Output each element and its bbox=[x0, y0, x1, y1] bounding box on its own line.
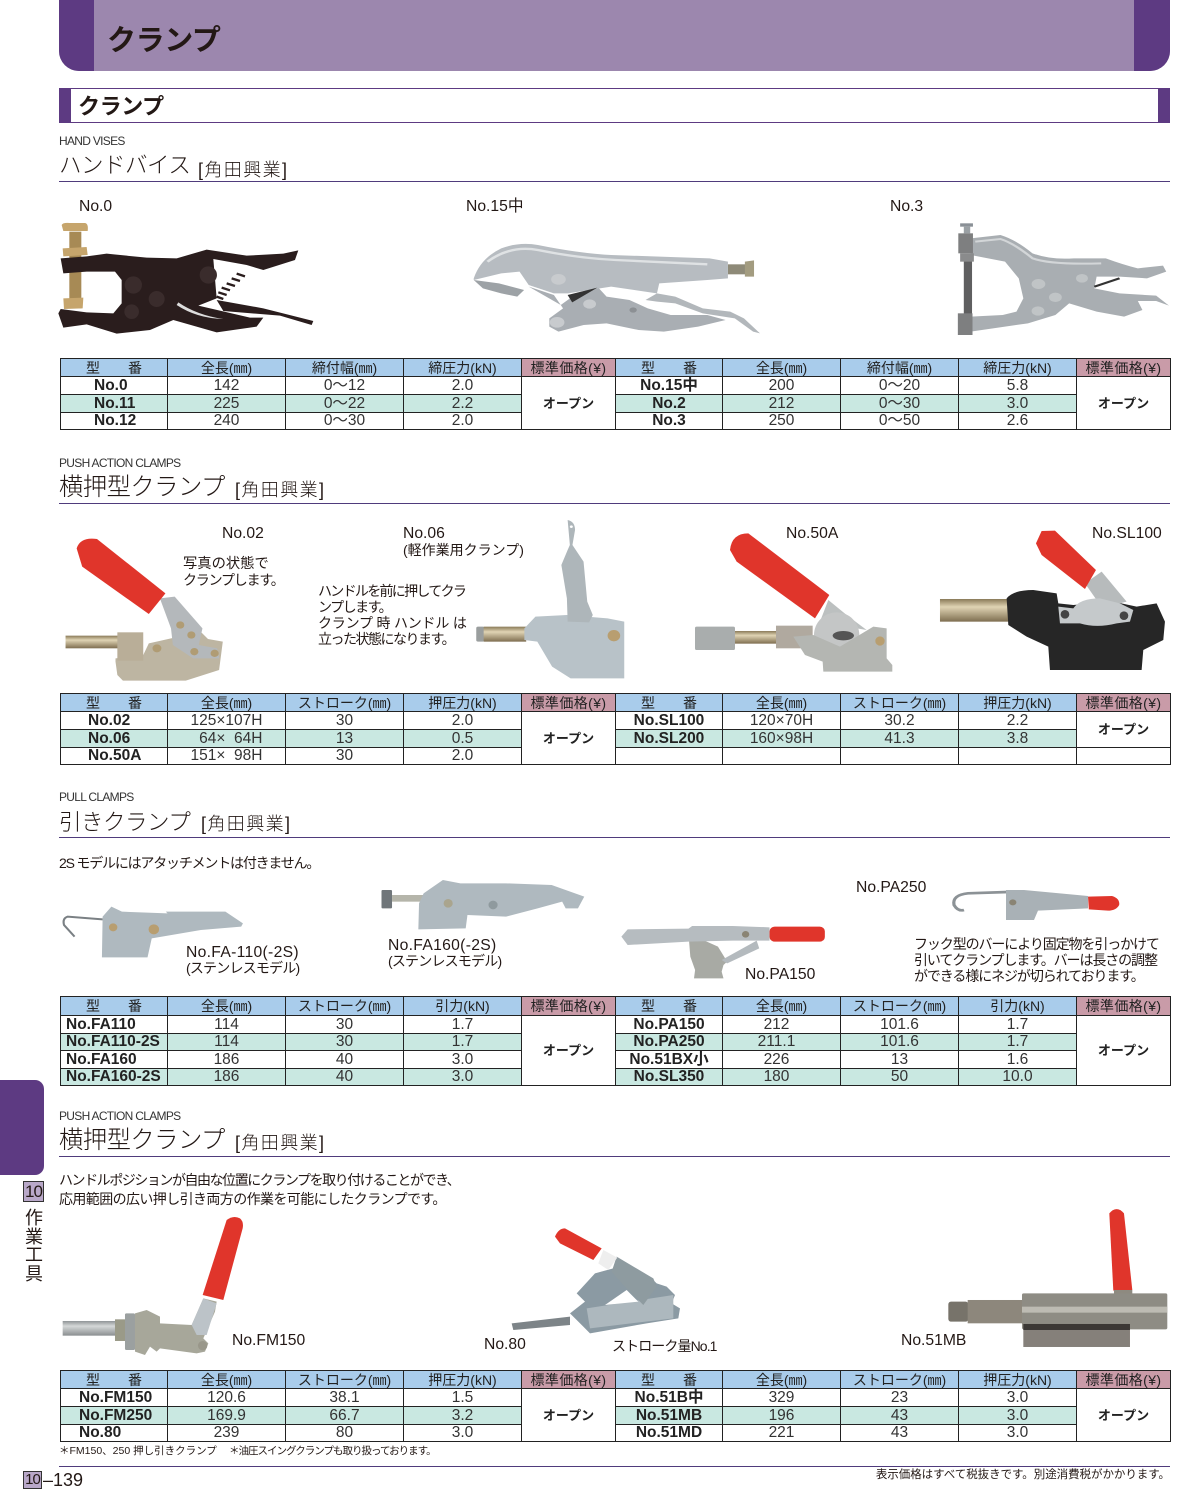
spec table: pull clamps: No.FA160 bbox=[66, 1050, 137, 1068]
section heading: pull clamps: [角田興業] bbox=[201, 814, 291, 834]
side tab bbox=[0, 1080, 44, 1175]
spec table: pull clamps bbox=[60, 996, 1171, 1086]
section heading: hand vises: ハンドバイス bbox=[59, 153, 190, 178]
spec table: hand vises: No.11 bbox=[94, 394, 135, 412]
spec table: push action clamps: 41.3 bbox=[884, 730, 915, 746]
spec table: push action clamps: No.SL100 bbox=[634, 712, 704, 729]
spec table: pull clamps: 標準価格(¥) bbox=[531, 998, 606, 1014]
spec table: hand vises: 2.0 bbox=[452, 377, 473, 394]
spec table: hand vises: 0～50 bbox=[879, 412, 920, 429]
section heading: push action clamps 2: 横押型クランプ bbox=[59, 1127, 225, 1154]
spec table: push action clamps: 64× 64H bbox=[199, 730, 262, 746]
spec table: pull clamps: No.FA160-2S bbox=[66, 1068, 161, 1085]
section heading: push action clamps: PUSH ACTION CLAMPS bbox=[59, 456, 180, 470]
spec table: push action clamps 2 bbox=[60, 1370, 1171, 1442]
spec table: pull clamps: No.FA110-2S bbox=[66, 1033, 160, 1050]
spec table: pull clamps: 114 bbox=[214, 1016, 239, 1032]
labels: push action clamps: クランプします。 bbox=[183, 572, 284, 588]
spec table: hand vises: 225 bbox=[214, 394, 239, 412]
spec table: pull clamps: 226 bbox=[764, 1050, 789, 1068]
description: push action clamps 2: ハンドルポジションが自由な位置にクランプを取り付けることができ、 bbox=[59, 1172, 459, 1188]
spec table: push action clamps: 型 番 bbox=[86, 694, 142, 710]
labels: pull clamps: (ステンレスモデル) bbox=[388, 953, 501, 969]
spec table: push action clamps 2: 43 bbox=[891, 1424, 908, 1441]
spec table: hand vises: No.15中 bbox=[640, 377, 698, 394]
spec table: pull clamps: ストローク(㎜) bbox=[298, 998, 391, 1014]
spec table: push action clamps: オープン bbox=[543, 730, 594, 746]
spec table: hand vises: 142 bbox=[214, 377, 239, 394]
spec table: pull clamps: 10.0 bbox=[1002, 1068, 1033, 1085]
spec table: push action clamps: 押圧力(kN) bbox=[983, 694, 1052, 710]
spec table: hand vises: 締圧力(kN) bbox=[983, 360, 1052, 376]
spec table: push action clamps: 120×70H bbox=[750, 712, 813, 729]
spec table: pull clamps: No.51BX小 bbox=[629, 1050, 709, 1068]
labels: pull clamps: No.FA160(-2S) bbox=[388, 937, 497, 954]
photo: hand vise No.3 bbox=[958, 223, 1169, 335]
spec table: push action clamps: 全長(㎜) bbox=[201, 694, 252, 710]
spec table: hand vises: 0～30 bbox=[324, 412, 365, 429]
section heading: pull clamps: 引きクランプ bbox=[59, 810, 190, 835]
spec table: pull clamps: 1.7 bbox=[452, 1016, 473, 1032]
labels: push action clamps: (軽作業用クランプ) bbox=[403, 542, 524, 558]
spec table: push action clamps 2: 169.9 bbox=[207, 1406, 246, 1424]
spec table: push action clamps: 30.2 bbox=[884, 712, 915, 729]
footnote: ＊FM150、250 押し引きクランプ bbox=[59, 1445, 217, 1457]
photo: clamp No.SL100 bbox=[940, 531, 1165, 670]
spec table: push action clamps 2: 型 番 bbox=[86, 1372, 142, 1388]
spec table: push action clamps: No.SL200 bbox=[634, 730, 704, 746]
photo: clamp No.06 bbox=[476, 520, 624, 678]
photo: hand vise No.0 bbox=[58, 223, 313, 334]
photo: clamp PA250 bbox=[954, 890, 1119, 920]
spec table: push action clamps 2: 239 bbox=[214, 1424, 239, 1441]
tax note: 表示価格はすべて税抜きです。別途消費税がかかります。 bbox=[876, 1469, 1170, 1481]
spec table: push action clamps 2: 全長(㎜) bbox=[201, 1372, 252, 1388]
photo: clamp No.51MB bbox=[948, 1209, 1167, 1347]
spec table: pull clamps: 40 bbox=[336, 1068, 353, 1085]
labels: push action clamps 2: No.51MB bbox=[901, 1332, 966, 1349]
spec table: push action clamps: ストローク(㎜) bbox=[298, 694, 391, 710]
spec table: push action clamps 2: 38.1 bbox=[329, 1389, 360, 1406]
section heading: hand vises: HAND VISES bbox=[59, 134, 125, 148]
section heading: pull clamps: PULL CLAMPS bbox=[59, 790, 134, 804]
labels: push action clamps: No.02 bbox=[222, 525, 264, 542]
labels: push action clamps 2: No.FM150 bbox=[232, 1332, 305, 1349]
spec table: pull clamps: 186 bbox=[214, 1068, 239, 1085]
spec table: push action clamps: 151× 98H bbox=[191, 747, 262, 764]
photo: clamp FA160 bbox=[382, 880, 584, 929]
photo: clamp FM150 bbox=[63, 1217, 243, 1355]
labels: hand vises: No.15中 bbox=[466, 198, 524, 215]
spec table: pull clamps: No.PA150 bbox=[633, 1016, 705, 1032]
spec table: push action clamps 2: オープン bbox=[543, 1408, 594, 1422]
spec table: pull clamps: 1.7 bbox=[1007, 1033, 1028, 1050]
spec table: push action clamps: ストローク(㎜) bbox=[853, 694, 946, 710]
spec table: pull clamps: 211.1 bbox=[758, 1033, 795, 1050]
photo: clamp No.50A bbox=[695, 533, 892, 672]
labels: pull clamps: 引いてクランプします。バーは長さの調整 bbox=[914, 952, 1157, 968]
labels: push action clamps bbox=[183, 525, 1162, 647]
spec table: push action clamps 2: ストローク(㎜) bbox=[298, 1372, 391, 1388]
spec table: push action clamps 2: No.FM150 bbox=[79, 1389, 152, 1406]
spec table: hand vises: 全長(㎜) bbox=[756, 360, 807, 376]
spec table: push action clamps: 125×107H bbox=[191, 712, 262, 729]
labels: push action clamps: 立った状態になります。 bbox=[318, 631, 454, 647]
section heading: pull clamps bbox=[59, 790, 1170, 838]
description: push action clamps 2: 応用範囲の広い押し引き両方の作業を可能にしたクランプです。 bbox=[59, 1191, 446, 1207]
side chapter number: 10 bbox=[25, 1182, 42, 1201]
spec table: push action clamps 2: No.80 bbox=[79, 1424, 121, 1441]
spec table: hand vises: No.12 bbox=[94, 412, 136, 429]
section heading: push action clamps: [角田興業] bbox=[235, 480, 325, 500]
spec table: push action clamps 2: ストローク(㎜) bbox=[853, 1372, 946, 1388]
spec table: push action clamps: 2.0 bbox=[452, 747, 473, 764]
spec table: pull clamps: 全長(㎜) bbox=[756, 998, 807, 1014]
spec table: pull clamps: オープン bbox=[1098, 1043, 1149, 1058]
section heading: hand vises bbox=[59, 134, 1170, 182]
spec table: pull clamps: 180 bbox=[764, 1068, 789, 1085]
spec table: push action clamps: 標準価格(¥) bbox=[531, 694, 606, 710]
spec table: push action clamps: No.02 bbox=[88, 712, 130, 729]
page number: 10 bbox=[25, 1471, 40, 1488]
spec table: pull clamps: 101.6 bbox=[880, 1016, 919, 1032]
spec table: push action clamps 2: 3.0 bbox=[1007, 1406, 1028, 1424]
spec table: hand vises: 標準価格(¥) bbox=[531, 360, 606, 376]
spec table: push action clamps 2: 329 bbox=[769, 1389, 794, 1406]
labels: pull clamps: フック型のバーにより固定物を引っかけて bbox=[914, 936, 1159, 952]
spec table: pull clamps: 引力(kN) bbox=[435, 998, 490, 1014]
spec table: push action clamps 2: 23 bbox=[891, 1389, 908, 1406]
labels: push action clamps: 写真の状態で bbox=[183, 556, 269, 572]
spec table: pull clamps: 1.7 bbox=[452, 1033, 473, 1050]
spec table: push action clamps 2: 標準価格(¥) bbox=[531, 1372, 606, 1388]
spec table: hand vises: 締付幅(㎜) bbox=[312, 360, 377, 376]
spec table: push action clamps: 30 bbox=[336, 712, 353, 729]
page number: –139 bbox=[43, 1470, 83, 1490]
spec table: push action clamps 2: 押圧力(kN) bbox=[428, 1372, 497, 1388]
labels: push action clamps: No.50A bbox=[786, 525, 838, 542]
spec table: hand vises: 型 番 bbox=[641, 360, 697, 376]
spec table: pull clamps: 型 番 bbox=[86, 998, 142, 1014]
section heading: push action clamps bbox=[59, 456, 1170, 504]
spec table: push action clamps 2: No.51MB bbox=[636, 1406, 702, 1424]
spec table: hand vises: 0～20 bbox=[879, 377, 920, 394]
spec table: push action clamps 2: No.FM250 bbox=[79, 1406, 152, 1424]
spec table: pull clamps: 50 bbox=[891, 1068, 908, 1085]
labels: push action clamps: ハンドルを前に押してクラ bbox=[318, 583, 465, 599]
side chapter name: 作業工具 bbox=[25, 1208, 43, 1284]
category heading bar bbox=[59, 88, 1170, 123]
spec table: push action clamps 2: 196 bbox=[769, 1406, 794, 1424]
spec table: pull clamps: 186 bbox=[214, 1050, 239, 1068]
spec table: pull clamps: ストローク(㎜) bbox=[853, 998, 946, 1014]
spec table: hand vises bbox=[60, 358, 1171, 430]
page banner bbox=[59, 0, 1170, 71]
spec table: push action clamps 2: 120.6 bbox=[207, 1389, 246, 1406]
category heading text: クランプ bbox=[78, 94, 164, 119]
spec table: pull clamps: 101.6 bbox=[880, 1033, 919, 1050]
spec table: pull clamps: 114 bbox=[214, 1033, 239, 1050]
labels: hand vises: No.0 bbox=[79, 198, 112, 215]
spec table: push action clamps 2: No.51B中 bbox=[635, 1389, 703, 1406]
spec table: push action clamps: 160×98H bbox=[750, 730, 813, 746]
spec table: pull clamps: No.PA250 bbox=[633, 1033, 705, 1050]
spec table: push action clamps: 押圧力(kN) bbox=[428, 694, 497, 710]
spec table: hand vises: オープン bbox=[543, 396, 594, 410]
labels: pull clamps: No.PA150 bbox=[745, 966, 815, 983]
section heading: push action clamps 2: [角田興業] bbox=[235, 1133, 325, 1153]
spec table: hand vises: 全長(㎜) bbox=[201, 360, 252, 376]
spec table: push action clamps: No.06 bbox=[88, 730, 130, 746]
spec table: pull clamps: 13 bbox=[891, 1050, 908, 1068]
spec table: hand vises: 200 bbox=[769, 377, 794, 394]
spec table: push action clamps 2: 押圧力(kN) bbox=[983, 1372, 1052, 1388]
labels: push action clamps: ンプします。 bbox=[318, 599, 391, 615]
photo: clamp No.80 bbox=[512, 1228, 680, 1333]
spec table: push action clamps 2: 全長(㎜) bbox=[756, 1372, 807, 1388]
footnote: ＊油圧スイングクランプも取り扱っております。 bbox=[229, 1445, 436, 1457]
note: pull clamps: 2S モデルにはアタッチメントは付きません。 bbox=[59, 855, 319, 871]
spec table: push action clamps: 3.8 bbox=[1007, 730, 1028, 746]
spec table: push action clamps 2: 221 bbox=[769, 1424, 794, 1441]
photo: clamp PA150 bbox=[621, 926, 825, 978]
labels: push action clamps 2: No.80 bbox=[484, 1336, 526, 1353]
spec table: pull clamps: 3.0 bbox=[452, 1050, 473, 1068]
spec table: hand vises: 5.8 bbox=[1007, 377, 1028, 394]
spec table: push action clamps: 13 bbox=[336, 730, 353, 746]
spec table: push action clamps 2: 3.0 bbox=[1007, 1424, 1028, 1441]
labels: pull clamps bbox=[186, 879, 1159, 984]
spec table: push action clamps 2: 80 bbox=[336, 1424, 353, 1441]
section heading: push action clamps 2: PUSH ACTION CLAMPS bbox=[59, 1109, 180, 1123]
spec table: push action clamps 2: No.51MD bbox=[636, 1424, 702, 1441]
labels: push action clamps: No.06 bbox=[403, 525, 445, 542]
spec table: hand vises: 0～22 bbox=[324, 394, 365, 412]
spec table: hand vises: オープン bbox=[1098, 396, 1149, 410]
section heading: push action clamps: 横押型クランプ bbox=[59, 474, 225, 501]
labels: pull clamps: ができる様にネジが切られております。 bbox=[914, 968, 1144, 984]
spec table: push action clamps 2: 3.2 bbox=[452, 1406, 473, 1424]
spec table: pull clamps: No.FA110 bbox=[66, 1016, 136, 1032]
spec table: push action clamps 2: オープン bbox=[1098, 1408, 1149, 1422]
labels: push action clamps: No.SL100 bbox=[1092, 525, 1162, 542]
spec table: hand vises: 2.6 bbox=[1007, 412, 1028, 429]
spec table: hand vises: 240 bbox=[214, 412, 239, 429]
spec table: pull clamps: 212 bbox=[764, 1016, 789, 1032]
spec table: push action clamps 2: 標準価格(¥) bbox=[1086, 1372, 1161, 1388]
spec table: hand vises: 2.2 bbox=[452, 394, 473, 412]
spec table: push action clamps: オープン bbox=[1098, 722, 1149, 737]
spec table: hand vises: 3.0 bbox=[1007, 394, 1028, 412]
spec table: push action clamps: 0.5 bbox=[452, 730, 473, 746]
spec table: push action clamps: 全長(㎜) bbox=[756, 694, 807, 710]
page title: クランプ bbox=[107, 25, 221, 57]
photo: hand vise No.15 bbox=[474, 244, 760, 333]
spec table: pull clamps: 標準価格(¥) bbox=[1086, 998, 1161, 1014]
spec table: hand vises: 2.0 bbox=[452, 412, 473, 429]
labels: push action clamps 2 bbox=[232, 1332, 966, 1354]
spec table: push action clamps 2: 3.0 bbox=[1007, 1389, 1028, 1406]
spec table: push action clamps: No.50A bbox=[88, 747, 141, 764]
spec table: hand vises: 250 bbox=[769, 412, 794, 429]
spec table: push action clamps: 標準価格(¥) bbox=[1086, 694, 1161, 710]
spec table: pull clamps: オープン bbox=[543, 1043, 594, 1058]
spec table: push action clamps: 2.0 bbox=[452, 712, 473, 729]
footnote bbox=[59, 1445, 436, 1457]
spec table: hand vises: 212 bbox=[769, 394, 794, 412]
spec table: pull clamps: 40 bbox=[336, 1050, 353, 1068]
spec table: hand vises: 型 番 bbox=[86, 360, 142, 376]
labels: pull clamps: No.FA-110(-2S) bbox=[186, 944, 299, 961]
spec table: push action clamps bbox=[60, 693, 1171, 765]
photo: clamp FA-110 bbox=[64, 907, 243, 957]
spec table: push action clamps 2: 66.7 bbox=[329, 1406, 360, 1424]
spec table: pull clamps: 1.6 bbox=[1007, 1050, 1028, 1068]
labels: push action clamps: クランプ 時 ハンドル は bbox=[318, 615, 467, 631]
spec table: pull clamps: 引力(kN) bbox=[990, 998, 1045, 1014]
spec table: push action clamps 2: 3.0 bbox=[452, 1424, 473, 1441]
spec table: pull clamps: 3.0 bbox=[452, 1068, 473, 1085]
labels: hand vises bbox=[79, 197, 923, 215]
spec table: pull clamps: No.SL350 bbox=[634, 1068, 704, 1085]
spec table: push action clamps: 型 番 bbox=[641, 694, 697, 710]
spec table: push action clamps 2: 型 番 bbox=[641, 1372, 697, 1388]
spec table: pull clamps: 型 番 bbox=[641, 998, 697, 1014]
spec table: pull clamps: 30 bbox=[336, 1033, 353, 1050]
spec table: push action clamps 2: 1.5 bbox=[452, 1389, 473, 1406]
spec table: hand vises: 締付幅(㎜) bbox=[867, 360, 932, 376]
section heading: hand vises: [角田興業] bbox=[198, 160, 288, 180]
spec table: push action clamps 2: 43 bbox=[891, 1406, 908, 1424]
spec table: pull clamps: 全長(㎜) bbox=[201, 998, 252, 1014]
labels: push action clamps 2: ストローク量No.1 bbox=[612, 1338, 717, 1354]
description: push action clamps 2 bbox=[59, 1172, 459, 1207]
spec table: hand vises: 標準価格(¥) bbox=[1086, 360, 1161, 376]
spec table: pull clamps: 30 bbox=[336, 1016, 353, 1032]
labels: pull clamps: No.PA250 bbox=[856, 879, 926, 896]
spec table: hand vises: 0～30 bbox=[879, 394, 920, 412]
spec table: pull clamps: 1.7 bbox=[1007, 1016, 1028, 1032]
spec table: hand vises: No.2 bbox=[652, 394, 686, 412]
spec table: hand vises: 0～12 bbox=[324, 377, 365, 394]
spec table: hand vises: No.3 bbox=[652, 412, 686, 429]
section heading: push action clamps 2 bbox=[59, 1109, 1170, 1157]
page number bbox=[23, 1470, 83, 1490]
photo: clamp No.02 bbox=[66, 539, 223, 681]
labels: pull clamps: (ステンレスモデル) bbox=[186, 960, 299, 976]
spec table: push action clamps: 2.2 bbox=[1007, 712, 1028, 729]
spec table: hand vises: 締圧力(kN) bbox=[428, 360, 497, 376]
spec table: push action clamps: 30 bbox=[336, 747, 353, 764]
spec table: hand vises: No.0 bbox=[94, 377, 128, 394]
labels: hand vises: No.3 bbox=[890, 198, 923, 215]
